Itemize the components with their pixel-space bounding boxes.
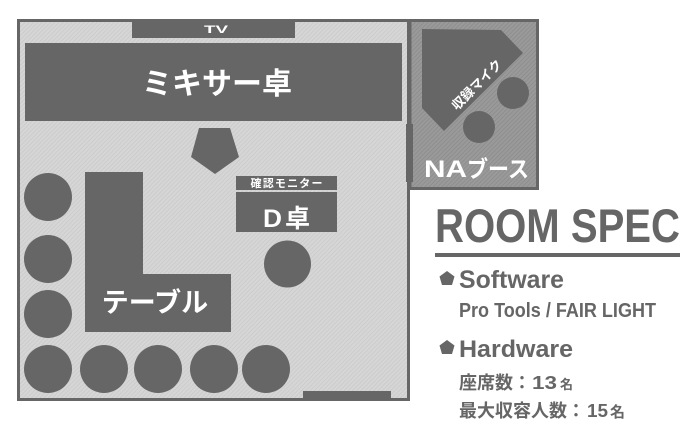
D desk: 卓 [285, 205, 310, 233]
mixer desk: ミキサー卓 [142, 68, 292, 101]
icon: hardware bullet [440, 340, 454, 354]
booth label: ブース [467, 156, 529, 182]
monitor label: 確認モニター [250, 176, 322, 190]
capacity: 名 [610, 403, 625, 421]
panel: NA booth [406, 20, 538, 188]
mixer desk [25, 43, 402, 121]
panel: room spec [435, 199, 680, 421]
recording mic area: 収録マイク [449, 57, 505, 113]
panel: main room [18, 19, 408, 401]
hardware heading: Hardware [459, 336, 573, 363]
booth seats [463, 77, 529, 143]
D desk: D [263, 205, 282, 233]
booth label: NA [424, 156, 467, 183]
booth label [424, 156, 529, 183]
seat count: 座席数： [459, 373, 531, 393]
D desk [236, 192, 337, 233]
seat count: 13 [532, 373, 557, 393]
software text: Pro Tools / FAIR LIGHT [459, 300, 656, 322]
booth door [406, 124, 413, 182]
L-shaped table: テーブル [102, 287, 208, 318]
TV bar [132, 19, 295, 38]
TV bar: TV [204, 24, 229, 36]
seat beside D desk [264, 240, 311, 288]
seats [24, 173, 290, 393]
icon: software bullet [440, 271, 454, 285]
recording mic area [422, 29, 523, 131]
heading rule [435, 253, 680, 257]
software heading: Software [459, 266, 564, 294]
capacity: 15 [587, 401, 608, 421]
icon: engineer seat pentagon [191, 128, 239, 174]
door [303, 391, 391, 401]
seat count [459, 373, 573, 393]
L-shaped table [85, 172, 231, 332]
monitor label [236, 176, 337, 190]
capacity: 最大収容人数： [459, 401, 585, 421]
seat count: 名 [560, 377, 573, 392]
